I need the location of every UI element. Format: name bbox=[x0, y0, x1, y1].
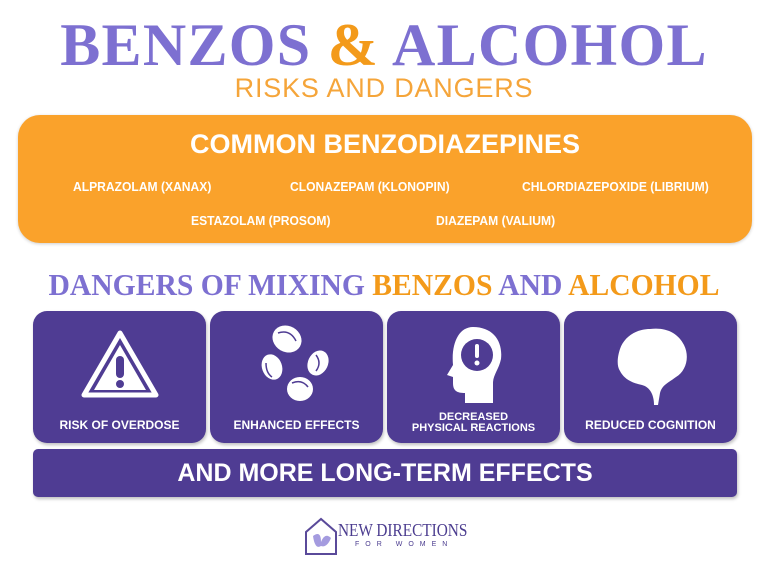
label: REDUCED COGNITION bbox=[585, 418, 716, 432]
icon: head with exclamation bbox=[447, 327, 502, 403]
drug: estazolam: ESTAZOLAM (PROSOM) bbox=[191, 213, 330, 228]
card: reduced cognition bbox=[564, 311, 737, 443]
logo icon: house bbox=[305, 518, 337, 555]
panel heading: COMMON BENZODIAZEPINES bbox=[190, 129, 580, 159]
label: ENHANCED EFFECTS bbox=[233, 418, 360, 432]
card: risk of overdose bbox=[33, 311, 206, 443]
drug: clonazepam: CLONAZEPAM (KLONOPIN) bbox=[290, 179, 450, 194]
bottom bar: more long-term effects: AND MORE LONG-TERM EFFECTS bbox=[177, 459, 593, 487]
icon: warning triangle bbox=[82, 330, 158, 398]
card: decreased physical reactions bbox=[387, 311, 560, 443]
section heading: DANGERS OF MIXING BENZOS AND ALCOHOL bbox=[49, 267, 719, 302]
bottom bar: more long-term effects bbox=[33, 449, 737, 497]
icon: pills bbox=[262, 326, 329, 401]
drug: chlordiazepoxide: CHLORDIAZEPOXIDE (LIBRIUM) bbox=[522, 179, 709, 194]
logo bbox=[305, 518, 467, 555]
label: PHYSICAL REACTIONS bbox=[412, 422, 535, 434]
label bbox=[412, 411, 535, 434]
drug: diazepam: DIAZEPAM (VALIUM) bbox=[436, 213, 555, 228]
drug: alprazolam: ALPRAZOLAM (XANAX) bbox=[73, 179, 211, 194]
icon: brain bbox=[618, 328, 687, 405]
card: enhanced effects bbox=[210, 311, 383, 443]
label: DECREASED bbox=[439, 411, 508, 423]
label: RISK OF OVERDOSE bbox=[59, 418, 180, 432]
drug list bbox=[73, 179, 709, 228]
logo: FOR WOMEN bbox=[355, 541, 453, 548]
logo text: NEW DIRECTIONS bbox=[338, 520, 467, 540]
subtitle: RISKS AND DANGERS bbox=[235, 73, 533, 103]
title: BENZOS & ALCOHOL bbox=[60, 12, 708, 78]
panel: common benzodiazepines bbox=[18, 115, 752, 243]
